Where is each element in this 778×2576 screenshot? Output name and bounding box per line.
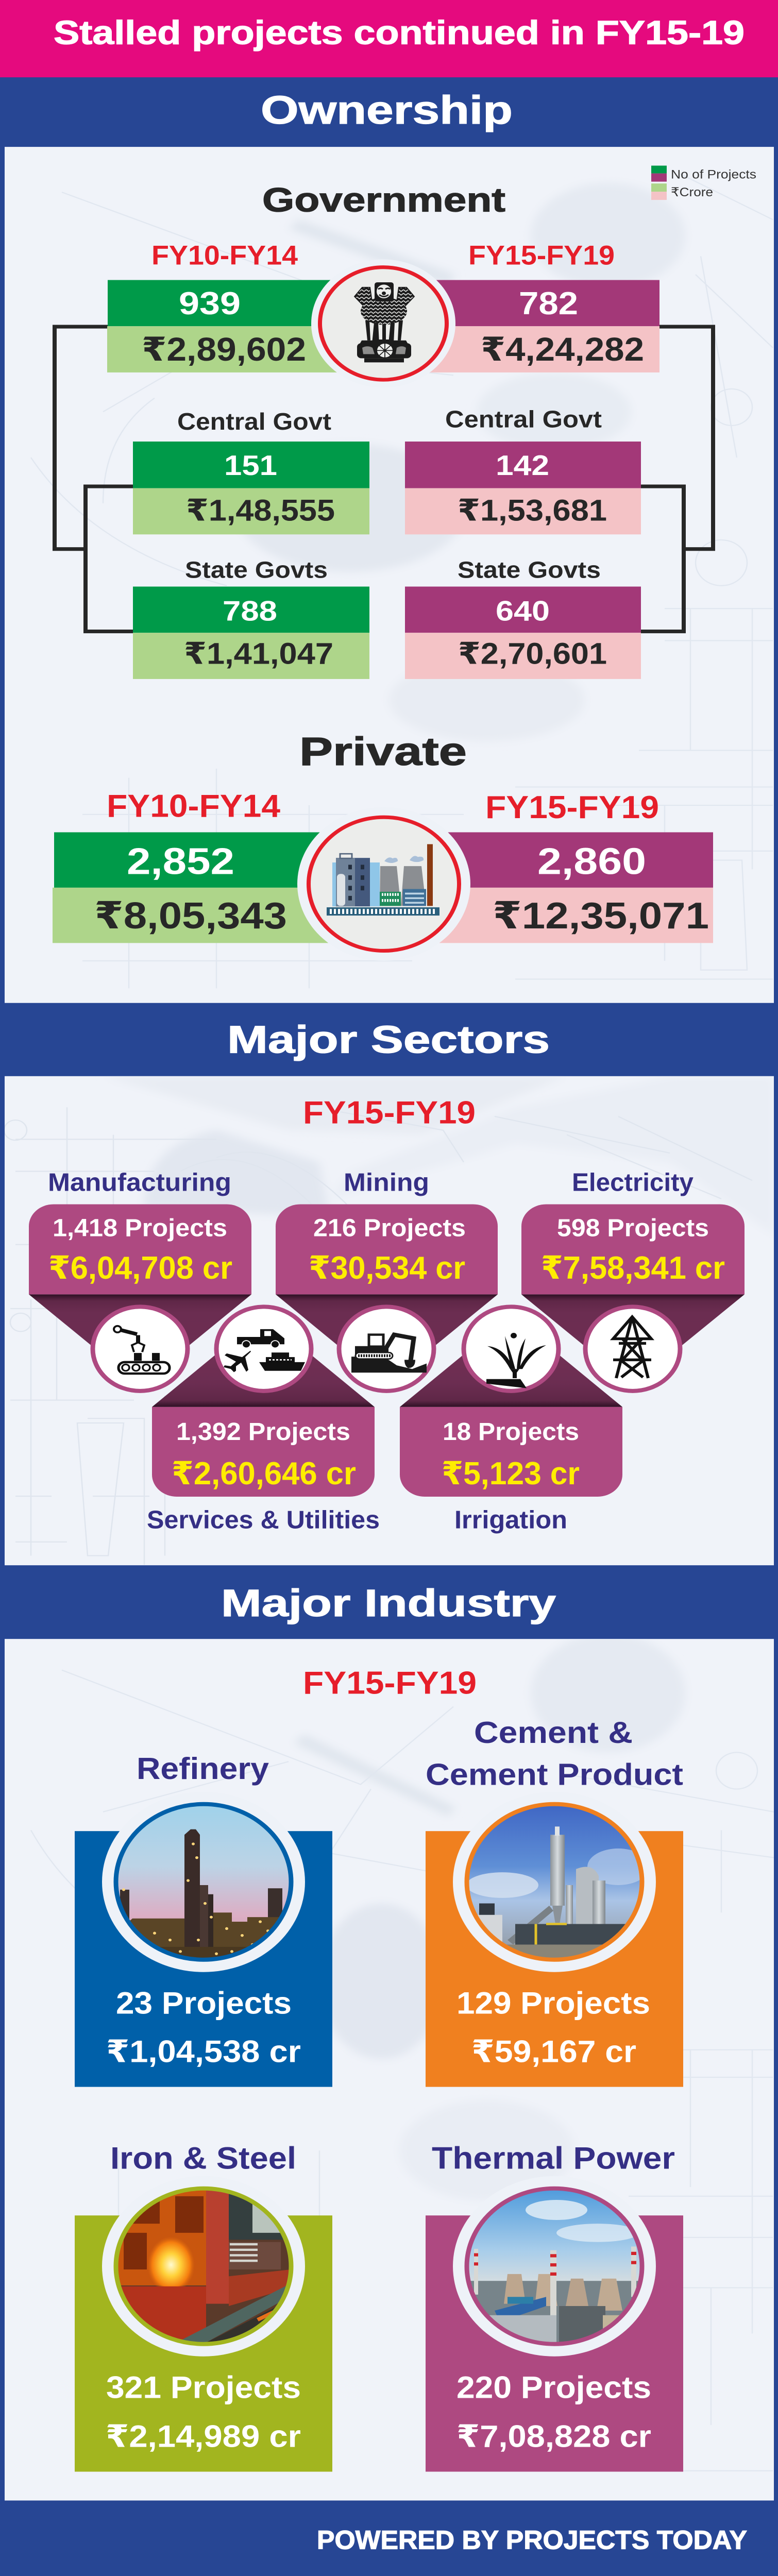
heading: government: Government bbox=[262, 181, 505, 218]
private total FY10-FY14: 2,852 bbox=[127, 840, 234, 882]
government total FY10-FY14: 939 bbox=[179, 286, 241, 321]
card: electricity: ₹7,58,341 cr bbox=[541, 1250, 725, 1286]
icon: factory bbox=[297, 807, 470, 961]
label: FY15-FY19 sectors: FY15-FY19 bbox=[303, 1095, 476, 1130]
label: refinery: Refinery bbox=[137, 1752, 269, 1786]
card: manufacturing: ₹6,04,708 cr bbox=[48, 1250, 232, 1286]
central govt FY15-FY19: ₹1,53,681 bbox=[458, 494, 607, 528]
centre lion head bbox=[375, 282, 394, 301]
lion legs bbox=[360, 320, 408, 344]
lion bodies bbox=[361, 297, 407, 325]
government total FY15-FY19: ₹4,24,282 bbox=[481, 331, 644, 368]
photo: iron and steel bbox=[116, 2187, 291, 2349]
label: cement and cement product: Cement & bbox=[474, 1716, 633, 1750]
panel: ownership bbox=[5, 147, 774, 1003]
legend: No of Projects bbox=[671, 168, 756, 181]
central govt FY10-FY14: ₹1,48,555 bbox=[186, 494, 335, 528]
state govts FY15-FY19 bbox=[405, 587, 641, 679]
label: FY15-FY19 government: FY15-FY19 bbox=[468, 240, 615, 271]
card: electricity: 598 Projects bbox=[557, 1214, 709, 1242]
icon: excavator bbox=[339, 1307, 434, 1391]
label: thermal power: Thermal Power bbox=[432, 2141, 675, 2176]
government total FY10-FY14 bbox=[107, 280, 355, 372]
state govts FY10-FY14 bbox=[133, 587, 369, 679]
private total FY10-FY14: ₹8,05,343 bbox=[94, 895, 287, 937]
abacus with wheel bbox=[357, 343, 411, 362]
card: services and utilities bbox=[152, 1315, 375, 1497]
icon: irrigation sprinkler bbox=[464, 1307, 559, 1391]
icon: national emblem bbox=[311, 260, 455, 387]
card: services and utilities: 1,392 Projects bbox=[176, 1418, 350, 1445]
card: cement: 129 Projects bbox=[456, 1986, 650, 2021]
label: electricity: Electricity bbox=[572, 1169, 694, 1197]
label: FY10-FY14 government: FY10-FY14 bbox=[151, 240, 298, 271]
label: cement and cement product: Cement Product bbox=[426, 1758, 683, 1792]
heading: private: Private bbox=[299, 730, 467, 774]
label: FY10-FY14 private: FY10-FY14 bbox=[107, 788, 280, 824]
government total FY15-FY19 bbox=[412, 280, 659, 372]
icon: truck plane ship bbox=[216, 1307, 311, 1391]
card: manufacturing bbox=[29, 1204, 251, 1385]
footer credit: POWERED BY PROJECTS TODAY bbox=[317, 2526, 747, 2555]
card: iron and steel: 321 Projects bbox=[106, 2370, 301, 2405]
label: iron and steel: Iron & Steel bbox=[110, 2141, 296, 2176]
label: manufacturing: Manufacturing bbox=[48, 1169, 231, 1197]
card: mining: 216 Projects bbox=[313, 1214, 466, 1242]
section header: major industry: Major Industry bbox=[221, 1581, 556, 1624]
central govt FY10-FY14 bbox=[133, 442, 369, 534]
government total FY15-FY19: 782 bbox=[519, 286, 578, 321]
label: state govts FY15-FY19: State Govts bbox=[458, 557, 601, 583]
panel: major industry bbox=[5, 1634, 774, 2500]
card: mining bbox=[276, 1204, 498, 1385]
card: manufacturing: 1,418 Projects bbox=[53, 1214, 227, 1242]
card: thermal power: ₹7,08,828 cr bbox=[456, 2419, 651, 2454]
card: refinery: ₹1,04,538 cr bbox=[106, 2034, 301, 2069]
private total FY15-FY19: ₹12,35,071 bbox=[493, 895, 709, 937]
card: irrigation bbox=[400, 1315, 622, 1497]
section header: major sectors: Major Sectors bbox=[227, 1018, 550, 1061]
card: mining: ₹30,534 cr bbox=[309, 1250, 465, 1286]
section header: ownership: Ownership bbox=[261, 88, 513, 132]
private total FY10-FY14 bbox=[53, 832, 348, 943]
card: thermal power bbox=[426, 2176, 683, 2472]
card: refinery bbox=[75, 1792, 332, 2087]
label: mining: Mining bbox=[344, 1169, 429, 1197]
private total FY15-FY19: 2,860 bbox=[537, 840, 646, 882]
card: thermal power: 220 Projects bbox=[456, 2370, 651, 2405]
card: irrigation: ₹5,123 cr bbox=[442, 1456, 580, 1492]
card: cement: ₹59,167 cr bbox=[471, 2034, 636, 2069]
label: central govt FY15-FY19: Central Govt bbox=[445, 406, 602, 433]
label: FY15-FY19 private: FY15-FY19 bbox=[485, 790, 659, 825]
legend: ₹Crore bbox=[671, 185, 713, 199]
card: services and utilities: ₹2,60,646 cr bbox=[172, 1456, 356, 1492]
icon: robot arm conveyor bbox=[93, 1307, 188, 1391]
card: cement bbox=[426, 1792, 683, 2087]
label: cement and cement product bbox=[426, 1716, 683, 1792]
title banner bbox=[0, 0, 778, 77]
label: central govt FY10-FY14: Central Govt bbox=[177, 409, 331, 435]
card: iron and steel: ₹2,14,989 cr bbox=[106, 2419, 301, 2454]
label: services and utilities: Services & Utilities bbox=[147, 1506, 380, 1534]
central govt FY15-FY19 bbox=[405, 442, 641, 534]
legend bbox=[651, 165, 756, 200]
card: irrigation: 18 Projects bbox=[443, 1418, 579, 1445]
state govts FY15-FY19: ₹2,70,601 bbox=[458, 637, 607, 671]
photo: cement plant bbox=[464, 1804, 649, 1965]
card: iron and steel bbox=[75, 2176, 332, 2472]
private total FY15-FY19 bbox=[422, 832, 713, 943]
central govt FY15-FY19: 142 bbox=[496, 450, 549, 481]
state govts FY10-FY14: 788 bbox=[223, 595, 277, 626]
government total FY10-FY14: ₹2,89,602 bbox=[142, 331, 306, 368]
label: irrigation: Irrigation bbox=[454, 1506, 567, 1534]
central govt FY10-FY14: 151 bbox=[224, 450, 277, 481]
title: Stalled projects continued in FY15-19 bbox=[54, 14, 745, 51]
state govts FY10-FY14: ₹1,41,047 bbox=[184, 637, 333, 671]
card: electricity bbox=[521, 1204, 745, 1385]
connector brackets bbox=[55, 327, 713, 632]
label: state govts FY10-FY14: State Govts bbox=[185, 557, 328, 583]
photo: thermal power plant bbox=[466, 2189, 642, 2349]
icon: electricity pylon bbox=[585, 1307, 680, 1391]
state govts FY15-FY19: 640 bbox=[496, 595, 550, 626]
label: FY15-FY19 industry: FY15-FY19 bbox=[303, 1665, 477, 1701]
photo: refinery bbox=[113, 1804, 299, 1968]
side lion heads bbox=[354, 287, 414, 306]
panel: major sectors bbox=[4, 1076, 774, 1565]
card: refinery: 23 Projects bbox=[116, 1986, 292, 2021]
